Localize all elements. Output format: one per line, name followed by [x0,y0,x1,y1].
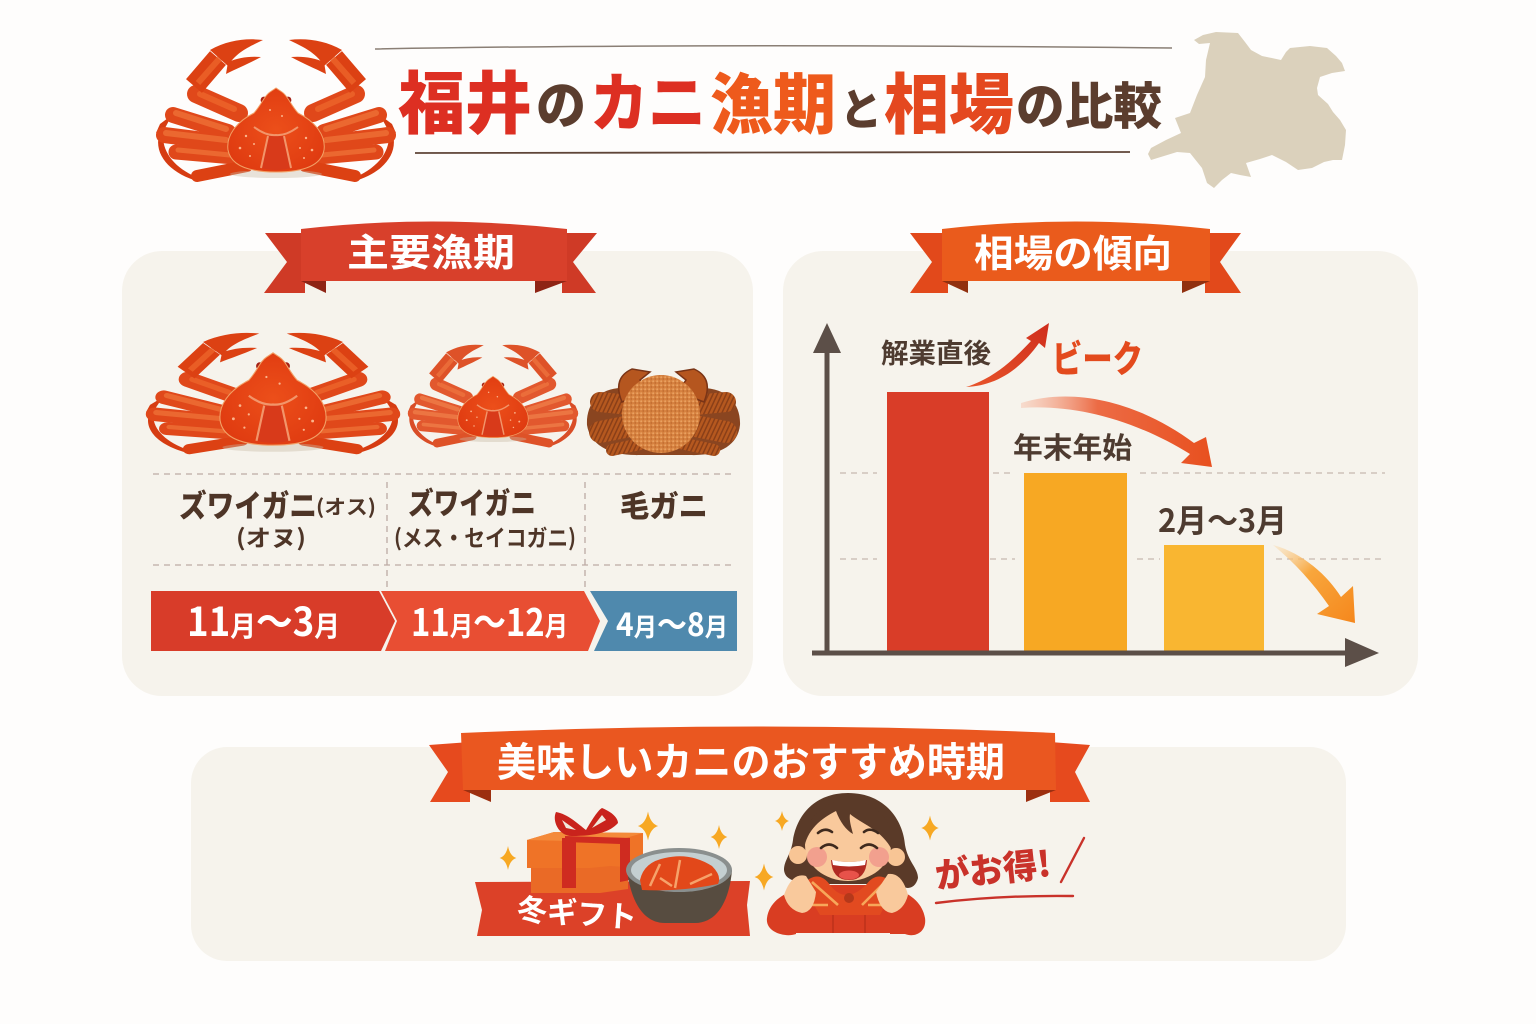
chart gridlines [840,473,1385,559]
callout: がお得!: がお得! [932,836,1053,899]
ribbon heading: main seasons: 主要漁期 [347,222,515,277]
panel: recommended period [191,726,1346,961]
label: snow crab male: ズワイガニ [179,481,317,526]
arrow: falling after March [1273,545,1355,623]
panel: main fishing seasons [122,222,753,696]
bar: new year [1024,473,1127,651]
map of Fukui [1148,32,1346,188]
bar label: 2月〜3月: 2月～3月 [1158,496,1287,542]
season arrow: 4月〜8月: 4月～8月 [616,600,728,646]
label: snow crab female: ズワイガニ [408,479,536,523]
ribbon heading: recommended period: 美味しいカニのおすすめ時期 [497,730,1005,788]
bar label: 解業直後: 解業直後 [881,332,991,371]
title: カニ [590,53,706,145]
icons: sparkles [500,811,939,890]
label: snow crab female: (メス・セイコガニ) [394,519,576,553]
ribbon heading: price trend [910,222,1241,293]
crab: snow crab female [408,345,578,446]
title: 漁期 [710,52,836,148]
ribbon heading: price trend: 相場の傾向 [974,223,1172,278]
bar label: 年末年始: 年末年始 [1013,425,1132,467]
crab illustration: header [156,39,396,180]
label: snow crab male: (オヌ) [236,519,306,553]
arrow: falling to new year [1021,396,1212,467]
label: hairy crab: 毛ガニ [620,482,708,526]
season arrow: 11月〜12月: 11月～12月 [411,592,568,647]
illustration: girl eating crab [767,793,925,935]
banner: winter gift [475,881,750,937]
banner: winter gift: 冬ギフト [516,885,639,937]
arrow: rising to peak [966,323,1049,387]
table dividers [153,474,735,590]
icon: gift box [527,808,643,893]
chart axes [812,323,1379,667]
title: 福井 [398,49,532,148]
panel: price trend [783,222,1418,696]
title [375,46,1172,153]
label: snow crab male: (オス) [316,491,376,520]
crab: hairy crab [587,369,740,455]
title: の比較 [1016,67,1162,139]
label: snow crab male [179,481,376,553]
title: の [536,64,586,139]
bar: just after opening [887,392,989,651]
ribbon heading: recommended period [429,726,1090,802]
title: と [840,74,882,138]
season arrow: 11月〜12月 [381,591,600,651]
season arrow: 11月〜3月 [151,590,395,651]
season arrow: 4月〜8月 [590,591,737,651]
bar: Feb to Mar [1164,545,1264,651]
title: 相場 [884,52,1014,148]
peak label: ビーク [1052,329,1143,383]
season arrow: 11月〜3月: 11月～3月 [187,590,340,648]
ribbon heading: main seasons [264,222,597,293]
icon: bowl of crab [626,848,732,923]
label: snow crab female [394,479,576,553]
crab: snow crab male [146,333,400,452]
